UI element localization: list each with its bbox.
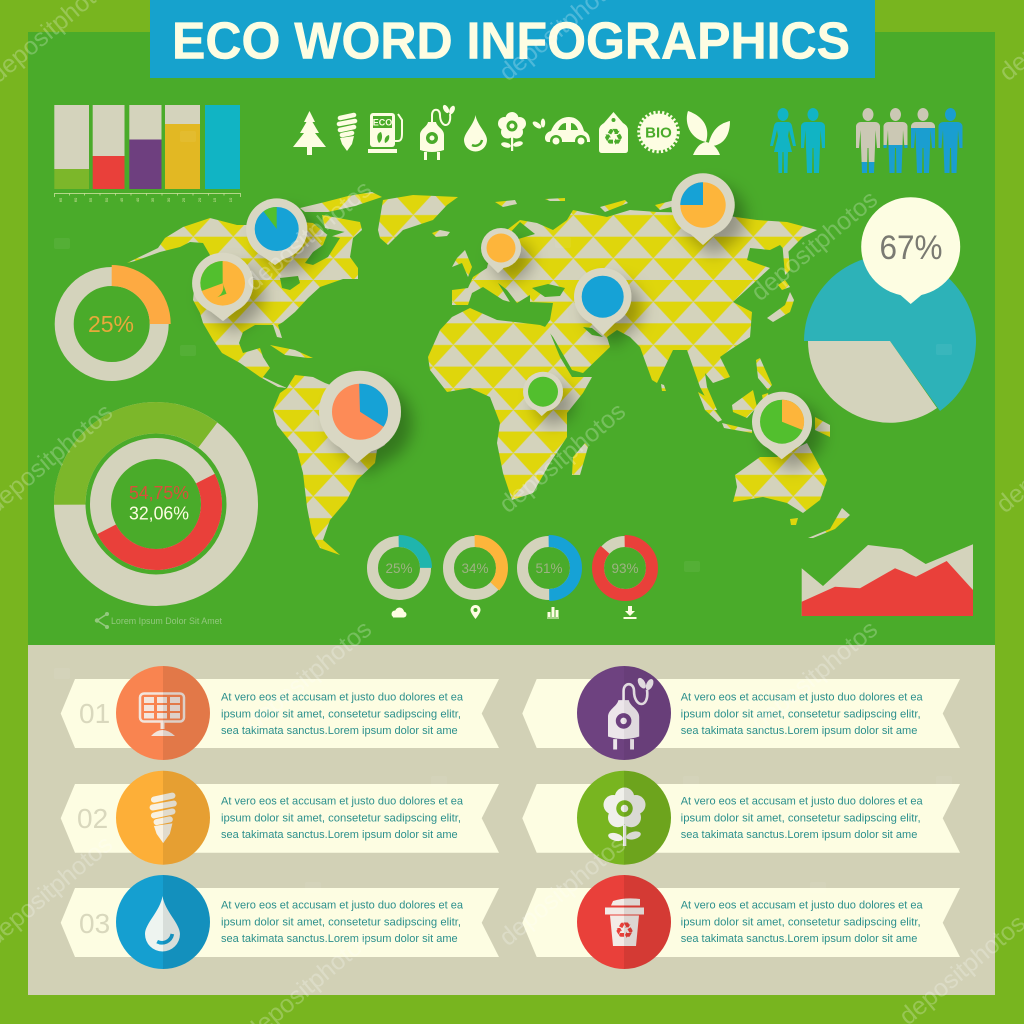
japan (767, 235, 794, 322)
bar chart: 65 (58, 197, 63, 202)
africa (428, 308, 592, 500)
small donut: 93% (598, 541, 652, 595)
bar chart: 35 (150, 197, 155, 202)
icon: solar panel (140, 694, 184, 736)
people icons: blue level figures (856, 108, 962, 173)
south america (273, 375, 395, 555)
list row recycle bin: ipsum dolor sit amet, consetetur sadipscing elitr, (681, 916, 921, 928)
watermarks: depositphotos (240, 615, 377, 737)
list row 03: ipsum dolor sit amet, consetetur sadipscing elitr, (221, 916, 461, 928)
callout: 67% (861, 197, 960, 304)
inland seas (508, 222, 603, 337)
bar chart: 45 (119, 197, 124, 202)
small donut: 25%: 25% (385, 561, 413, 576)
icon: sprout (687, 111, 730, 155)
watermark camera marks (54, 131, 952, 893)
icon: recycle tag: ♻ (603, 125, 624, 151)
bar chart: 55 (88, 197, 93, 202)
australia (733, 443, 827, 513)
tasmania (790, 518, 798, 525)
list row 03: 03 (79, 908, 110, 939)
list row flower (522, 771, 960, 865)
icon: BIO seal: BIO (645, 124, 672, 142)
big donut chart (70, 418, 242, 590)
bar chart: 20 (197, 197, 202, 202)
world map (127, 192, 850, 555)
list row plug: At vero eos et accusam et justo duo dolores et ea (681, 692, 923, 704)
watermarks: depositphotos (240, 175, 377, 297)
area chart (802, 544, 973, 616)
icon: BIO seal (639, 112, 678, 152)
map pin: south america (319, 371, 401, 463)
bar chart (54, 105, 240, 202)
new zealand (808, 508, 850, 538)
list row 01: ipsum dolor sit amet, consetetur sadipscing elitr, (221, 708, 461, 720)
callout: 67%: 67% (880, 229, 942, 267)
map pin: north america orange (192, 253, 253, 321)
caribbean (270, 345, 313, 358)
icon: location pin (470, 605, 480, 619)
iceland (432, 230, 450, 237)
list row recycle bin (522, 875, 960, 969)
icon: flower (498, 112, 526, 151)
icon: water drop (464, 115, 487, 152)
sri lanka (661, 384, 666, 391)
icon: eco fuel pump (368, 113, 402, 153)
people icons: two teal figures (770, 108, 825, 173)
watermarks: depositphotos (746, 185, 883, 307)
list row 01: sea takimata sanctus.Lorem ipsum dolor sit ame (221, 725, 458, 737)
list row plug: ipsum dolor sit amet, consetetur sadipscing elitr, (681, 708, 921, 720)
icon: plug (420, 104, 456, 160)
list row recycle bin: sea takimata sanctus.Lorem ipsum dolor sit ame (681, 933, 917, 945)
icon: bulb (339, 115, 355, 151)
map pin: middle east (574, 268, 631, 335)
arctic islands (300, 192, 382, 232)
list row flower: sea takimata sanctus.Lorem ipsum dolor sit ame (681, 829, 917, 841)
watermarks: depositphotos (494, 830, 631, 952)
map pin: africa (523, 372, 563, 416)
small donut: 51% (522, 541, 576, 595)
uk (452, 250, 472, 277)
list row 02 (61, 771, 499, 865)
icon: download (624, 606, 636, 619)
donut: 25%: 25% (88, 311, 134, 337)
list row 01: At vero eos et accusam et justo duo dolores et ea (221, 692, 464, 704)
title: ECO WORD INFOGRAPHICS (172, 12, 850, 70)
icon: recycle tag (599, 112, 628, 153)
icon: cloud (392, 608, 406, 618)
small donut: 93%: 93% (611, 561, 639, 576)
list row plug (522, 666, 960, 760)
bar chart: 15 (212, 197, 217, 202)
small donut: 34%: 34% (461, 561, 489, 576)
map pin: north america blue (246, 198, 307, 265)
right pie chart (804, 255, 976, 423)
list row 03: At vero eos et accusam et justo duo dolores et ea (221, 900, 464, 912)
north america (127, 218, 362, 388)
icon: bar chart (547, 607, 559, 618)
watermarks: depositphotos (746, 615, 883, 737)
share caption (95, 612, 222, 629)
southeast asia islands (698, 358, 830, 437)
list row plug: sea takimata sanctus.Lorem ipsum dolor sit ame (681, 725, 917, 737)
list row 03: sea takimata sanctus.Lorem ipsum dolor sit ame (221, 933, 458, 945)
watermarks: depositphotos (494, 397, 631, 519)
greenland (378, 195, 458, 245)
list row 02: At vero eos et accusam et justo duo dolores et ea (221, 796, 464, 808)
bar chart: 50 (104, 197, 109, 202)
icon: eco car (531, 117, 590, 147)
list row 02: ipsum dolor sit amet, consetetur sadipscing elitr, (221, 812, 461, 824)
eurasia (452, 210, 817, 410)
map pin: australia (752, 392, 812, 459)
map pin: russia (671, 173, 735, 245)
share caption: Lorem Ipsum Dolor Sit Amet (111, 616, 222, 626)
list row 01: 01 (79, 698, 110, 729)
list row 03 (61, 875, 499, 969)
small donut: 25% (372, 541, 426, 595)
bar chart: 10 (228, 197, 233, 202)
panel: beige list area (28, 645, 995, 995)
icon row (293, 104, 730, 160)
icon: plug (608, 677, 655, 750)
icon: recycle bin (605, 898, 644, 946)
icon: bulb (153, 796, 174, 843)
bar chart: 40 (135, 197, 140, 202)
icon: recycle bin: ♻ (615, 919, 634, 944)
list row 02: sea takimata sanctus.Lorem ipsum dolor sit ame (221, 829, 458, 841)
madagascar (572, 443, 588, 475)
small donut: 51%: 51% (535, 561, 563, 576)
hudson bay and lakes (280, 235, 340, 290)
small donut: 34% (448, 541, 502, 595)
icon: water drop (145, 896, 180, 951)
list row flower: At vero eos et accusam et justo duo dolores et ea (681, 796, 923, 808)
bar chart: 30 (166, 197, 171, 202)
bar chart: 25 (181, 197, 186, 202)
big donut chart: 54,75% (129, 482, 189, 503)
list row recycle bin: At vero eos et accusam et justo duo dolores et ea (681, 900, 923, 912)
north islands (495, 198, 678, 212)
donut: 25% (63, 276, 160, 372)
icon: flower (604, 788, 646, 846)
bar chart: 60 (73, 197, 78, 202)
list row 01 (61, 666, 499, 760)
list row flower: ipsum dolor sit amet, consetetur sadipscing elitr, (681, 812, 921, 824)
icon: eco fuel pump: ECO (373, 118, 392, 128)
map pin: europe (481, 228, 521, 273)
icon: tree (293, 111, 326, 155)
big donut chart: 32,06% (129, 502, 189, 524)
list row 02: 02 (77, 803, 108, 834)
panel: green map area (28, 32, 995, 645)
